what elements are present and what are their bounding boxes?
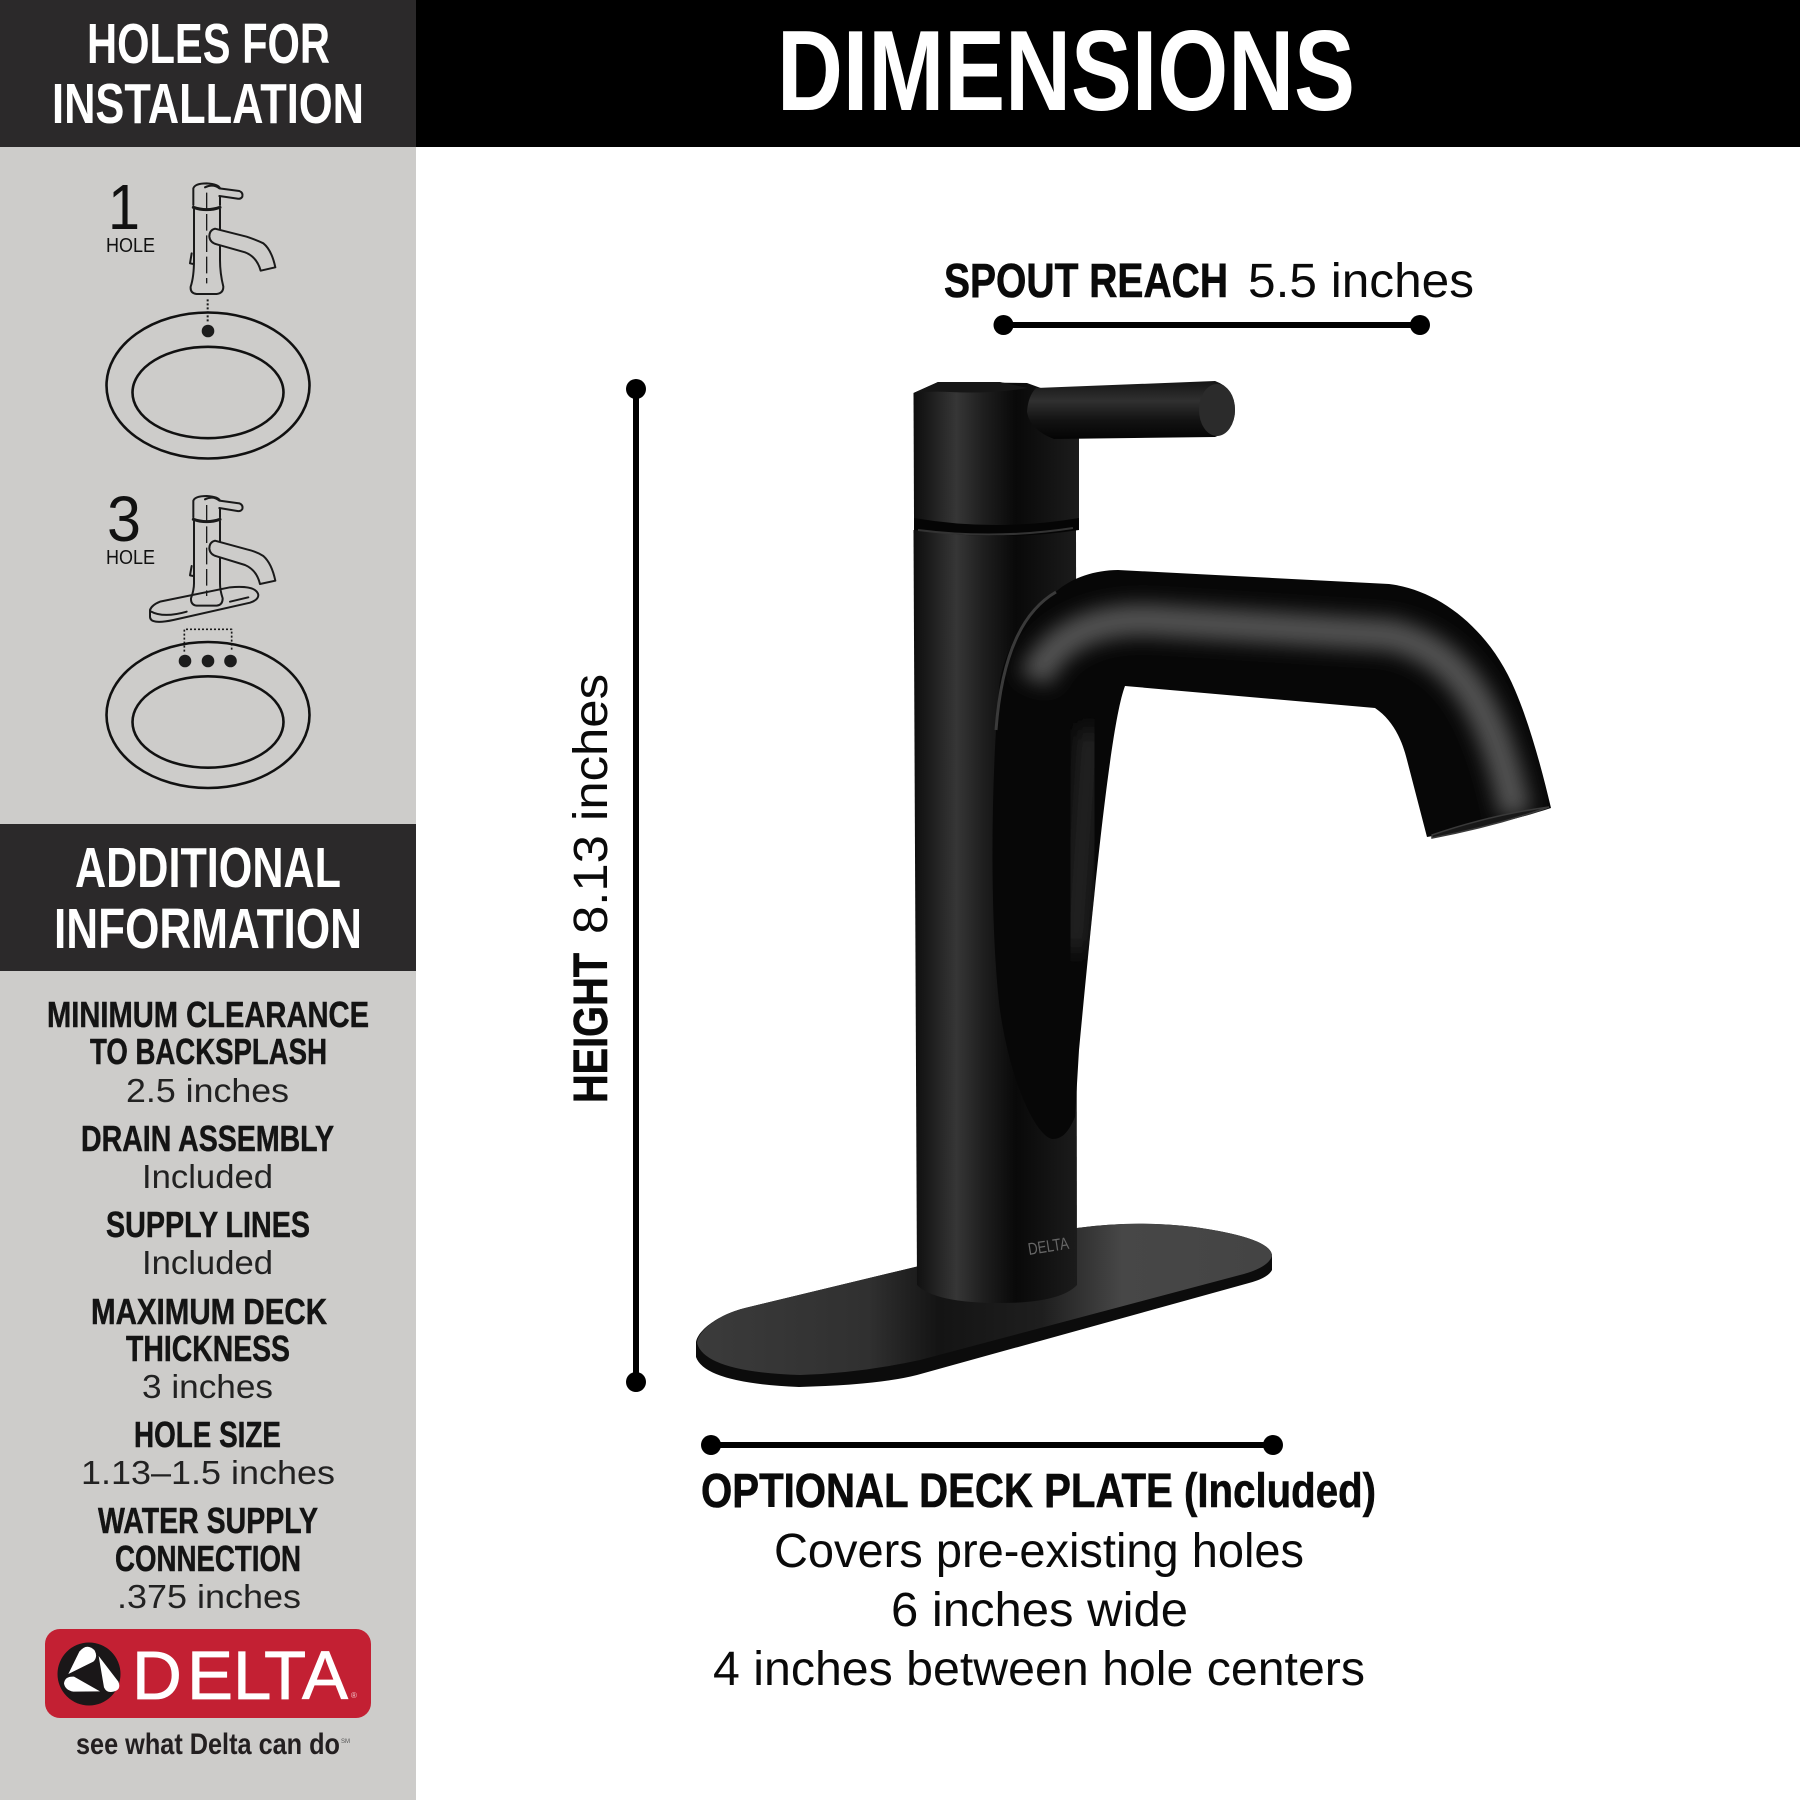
label xyxy=(944,255,1474,308)
dimension: spout reach xyxy=(944,255,1474,335)
label: 3 hole: 3 xyxy=(107,483,141,555)
label: 1 hole: 1 xyxy=(108,171,140,243)
title: DIMENSIONS xyxy=(777,8,1355,135)
text block: deck plate description: Covers pre-existing holes xyxy=(774,1525,1304,1578)
spec: maximum deck thickness: THICKNESS xyxy=(126,1328,290,1369)
lever handle xyxy=(1027,381,1235,439)
spec: maximum deck thickness: 3 inches xyxy=(142,1368,273,1405)
icon: faucet with deck plate xyxy=(150,496,275,652)
arrow: spout reach line xyxy=(994,315,1430,335)
logo: delta xyxy=(45,1629,371,1718)
icon: sink with one hole xyxy=(106,312,310,458)
text block: deck plate description: 6 inches wide xyxy=(891,1584,1188,1637)
spec: water supply connection xyxy=(98,1500,318,1615)
spout and neck xyxy=(992,570,1551,1139)
dimension: optional deck plate xyxy=(701,1435,1376,1696)
text block: deck plate description: OPTIONAL DECK PLATE (Included) xyxy=(701,1465,1376,1518)
panel: left sidebar background xyxy=(0,0,416,1800)
tagline: SM xyxy=(341,1739,350,1745)
faucet photo xyxy=(696,381,1551,1387)
wordmark: DELTA xyxy=(132,1637,348,1714)
tagline: see what Delta can do xyxy=(76,1728,340,1761)
spec: drain assembly: Included xyxy=(142,1158,273,1195)
spec: maximum deck thickness: MAXIMUM DECK xyxy=(91,1291,327,1332)
brand text on body: DELTA xyxy=(1027,1234,1071,1259)
diagram: 1 hole installation xyxy=(106,171,310,458)
faucet body xyxy=(914,530,1077,1303)
text block: deck plate description xyxy=(701,1465,1376,1696)
spec: hole size xyxy=(81,1414,335,1491)
heading: additional information: INFORMATION xyxy=(54,897,362,961)
label: HEIGHT xyxy=(565,953,618,1103)
icon: faucet line drawing xyxy=(190,183,275,323)
dimension: height xyxy=(565,379,646,1392)
spec: maximum deck thickness xyxy=(91,1291,327,1405)
spec: water supply connection: WATER SUPPLY xyxy=(98,1500,318,1541)
spec: minimum clearance xyxy=(47,994,369,1109)
handle block xyxy=(914,382,1079,525)
spec: water supply connection: CONNECTION xyxy=(115,1538,301,1579)
heading: holes for installation: HOLES FOR xyxy=(87,12,330,76)
label: 8.13 inches xyxy=(565,674,618,934)
text block: additional information list xyxy=(47,994,369,1615)
spec: minimum clearance: MINIMUM CLEARANCE xyxy=(47,994,369,1035)
header bar: dimensions xyxy=(416,0,1800,147)
icon: delta mark xyxy=(58,1642,120,1706)
heading: holes for installation xyxy=(52,12,364,136)
label: SPOUT REACH xyxy=(944,255,1228,308)
icon: sink with three holes xyxy=(106,642,310,788)
spec: hole size: HOLE SIZE xyxy=(134,1414,281,1455)
groove between body and handle block xyxy=(914,515,1079,536)
heading: holes for installation: INSTALLATION xyxy=(52,72,364,136)
spec: water supply connection: .375 inches xyxy=(117,1578,301,1615)
heading: additional information xyxy=(54,836,362,961)
spec: minimum clearance: TO BACKSPLASH xyxy=(90,1031,327,1072)
arrow: deck plate line xyxy=(701,1435,1283,1455)
label: 3 hole: HOLE xyxy=(106,547,155,569)
spec: supply lines: Included xyxy=(142,1244,273,1281)
label: 1 hole xyxy=(106,171,155,257)
spec: hole size: 1.13–1.5 inches xyxy=(81,1454,335,1491)
spec: supply lines: SUPPLY LINES xyxy=(106,1204,310,1245)
arrow: height line xyxy=(626,379,646,1392)
spec: minimum clearance: 2.5 inches xyxy=(126,1072,289,1109)
text block: deck plate description: 4 inches between hole centers xyxy=(713,1643,1365,1696)
spec: supply lines xyxy=(106,1204,310,1281)
label: 3 hole xyxy=(106,483,155,569)
spec: drain assembly xyxy=(81,1118,334,1195)
diagram: 3 hole installation xyxy=(106,483,310,788)
header bar: holes for installation xyxy=(0,0,416,147)
heading: additional information: ADDITIONAL xyxy=(75,836,341,900)
label xyxy=(565,674,618,1103)
label: 1 hole: HOLE xyxy=(106,235,155,257)
label: 5.5 inches xyxy=(1248,255,1474,308)
registered mark: ® xyxy=(351,1691,357,1700)
header bar: additional information xyxy=(0,824,416,971)
spec: drain assembly: DRAIN ASSEMBLY xyxy=(81,1118,334,1159)
deck plate xyxy=(696,1224,1272,1387)
